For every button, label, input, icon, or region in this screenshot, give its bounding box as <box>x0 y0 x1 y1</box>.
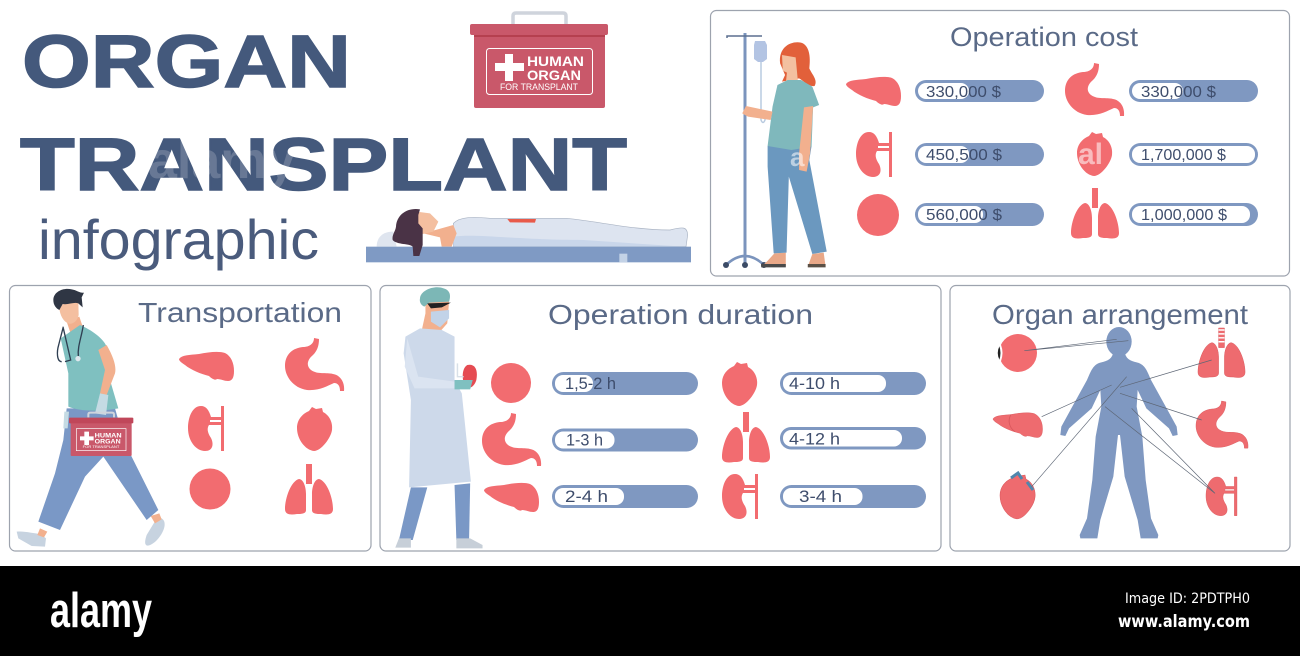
watermark fragments: a <box>790 142 805 172</box>
heading: transportation: Transportation <box>138 297 342 328</box>
icon: kidney <box>1206 477 1237 516</box>
icon: organ transport box: HUMAN <box>527 54 584 69</box>
duration bar: eye: 1,5-2 h <box>565 374 616 393</box>
icon: lungs <box>722 412 770 462</box>
icon: lungs <box>1071 188 1119 238</box>
cost bar: lungs: 1,000,000 $ <box>1141 207 1227 224</box>
cost bar: lungs <box>1129 203 1258 226</box>
panel: operation duration <box>380 286 941 551</box>
panel: operation cost <box>710 10 1290 276</box>
watermark fragments: al <box>1078 138 1103 171</box>
footer image id: Image ID: 2PDTPH0 <box>1125 591 1250 607</box>
footer band <box>0 566 1300 656</box>
icon: stomach <box>285 338 344 391</box>
duration bar: eye <box>552 372 698 395</box>
duration bar: kidney: 3-4 h <box>799 487 842 506</box>
watermark fragments: alamy <box>148 132 296 190</box>
illustration: doctor carrying box <box>17 289 165 547</box>
duration bar: liver <box>552 485 698 508</box>
illustration: patient standing <box>742 42 827 267</box>
icon: lungs <box>1198 328 1245 377</box>
panel: transportation <box>10 286 371 551</box>
cost bar: heart <box>1129 143 1258 166</box>
icon: kidney <box>188 406 224 451</box>
heading: organ arrangement: Organ arrangement <box>992 299 1248 330</box>
icon: organ transport box: ORGAN <box>527 68 581 83</box>
heading: operation cost: Operation cost <box>950 22 1139 52</box>
icon: organ transport box: FOR TRANSPLANT <box>500 82 578 92</box>
icon: heart <box>1000 473 1035 519</box>
cost bar: liver: 330,000 $ <box>926 84 1001 101</box>
duration bar: kidney <box>780 485 926 508</box>
duration bar: stomach: 1-3 h <box>566 430 603 450</box>
icon: eye <box>998 334 1037 372</box>
illustration: doctor carrying box: FOR TRANSPLANT <box>83 445 120 449</box>
icon: stomach <box>1065 63 1124 116</box>
illustration: body silhouette <box>1060 327 1178 538</box>
illustration: surgeon <box>395 287 483 548</box>
icon: kidney <box>722 474 758 519</box>
title <box>20 20 627 271</box>
footer url: www.alamy.com <box>1118 612 1250 632</box>
icon: liver <box>993 413 1042 438</box>
icon: liver <box>484 483 539 512</box>
cost bar: eye: 560,000 $ <box>926 207 1002 224</box>
cost bar: eye <box>915 203 1044 226</box>
icon: organ transport box <box>470 13 608 108</box>
icon: eye <box>190 468 230 510</box>
icon: liver <box>179 352 234 381</box>
cost bar: kidney: 450,500 $ <box>926 147 1002 164</box>
illustration: patient lying on bed <box>366 209 691 262</box>
illustration: doctor carrying box: HUMAN <box>95 432 122 439</box>
cost bar: stomach <box>1129 80 1258 102</box>
title: infographic <box>38 208 319 271</box>
icon: eye <box>857 194 899 236</box>
icon: lungs <box>285 464 333 514</box>
duration bar: lungs: 4-12 h <box>789 430 840 448</box>
icon: heart <box>297 407 332 451</box>
illustration: IV stand <box>723 33 767 268</box>
illustration: doctor carrying box: ORGAN <box>95 439 121 446</box>
duration bar: heart <box>780 372 926 395</box>
icon: stomach <box>1196 401 1248 448</box>
title: ORGAN <box>22 20 351 103</box>
connector lines <box>1024 339 1215 493</box>
duration bar: stomach <box>552 428 698 452</box>
icon: heart <box>722 362 757 406</box>
duration bar: lungs <box>780 427 926 450</box>
icon: kidney <box>856 132 892 177</box>
footer logo: alamy <box>50 584 152 638</box>
icon: stomach <box>482 413 541 466</box>
heading: operation duration: Operation duration <box>548 299 813 330</box>
watermark fragments <box>148 132 1103 190</box>
icon: liver <box>846 77 901 106</box>
icon: heart <box>1077 132 1112 176</box>
duration bar: heart: 4-10 h <box>789 374 840 393</box>
cost bar: heart: 1,700,000 $ <box>1141 147 1226 164</box>
cost bar: liver <box>915 80 1044 102</box>
panel: organ arrangement <box>148 132 1290 551</box>
title: TRANSPLANT <box>20 123 627 206</box>
icon: eye <box>491 363 531 403</box>
cost bar: stomach: 330,000 $ <box>1141 84 1216 101</box>
cost bar: kidney <box>915 143 1044 166</box>
duration bar: liver: 2-4 h <box>565 487 608 506</box>
